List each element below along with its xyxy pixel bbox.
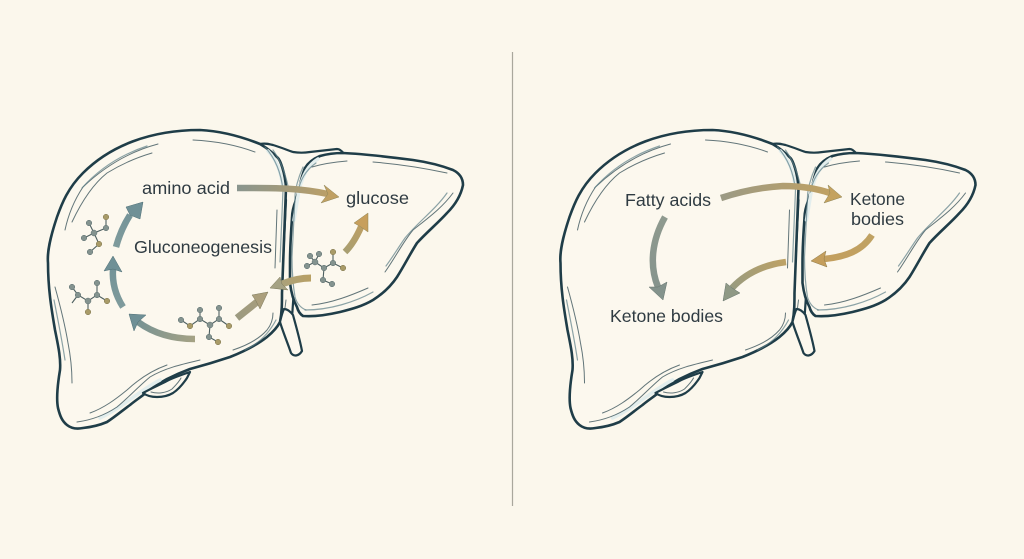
panel: ketone bodies <box>560 130 976 429</box>
label: amino acid: amino acid <box>142 178 230 198</box>
arrow: molecule to junction <box>237 292 268 318</box>
arrow: cycle upward <box>104 256 123 307</box>
arrow: ketone bodies leftward <box>811 235 872 267</box>
divider <box>512 52 514 506</box>
arrow: to glucose <box>345 213 368 252</box>
label: Ketone bodies (left lobe): Ketone bodies <box>610 306 723 326</box>
arrow: cycle to amino acid <box>116 202 143 247</box>
molecule: upper left <box>81 214 109 255</box>
arrow: cycle leftward <box>129 314 195 339</box>
arrow: amino acid to glucose <box>237 185 339 203</box>
molecule: right lobe <box>304 249 346 287</box>
arrow: fatty acids to ketone bodies (right lobe) <box>721 185 842 203</box>
label: Fatty acids: Fatty acids <box>625 190 711 210</box>
liver illustration: right <box>560 130 976 429</box>
molecule: lower left <box>69 280 110 315</box>
label: Gluconeogenesis: Gluconeogenesis <box>134 237 272 257</box>
arrow: right lobe to junction <box>270 277 311 290</box>
liver illustration: left <box>48 130 463 429</box>
label: Ketone bodies (right lobe): Ketone <box>850 189 905 209</box>
arrow: right lobe to ketone bodies <box>723 262 786 301</box>
panel: gluconeogenesis <box>48 130 463 429</box>
label: glucose: glucose <box>346 188 409 208</box>
arrow: fatty acids down to ketone bodies <box>649 217 667 300</box>
label: Ketone bodies (right lobe): bodies <box>851 209 904 229</box>
molecule: bottom centre <box>178 305 232 345</box>
